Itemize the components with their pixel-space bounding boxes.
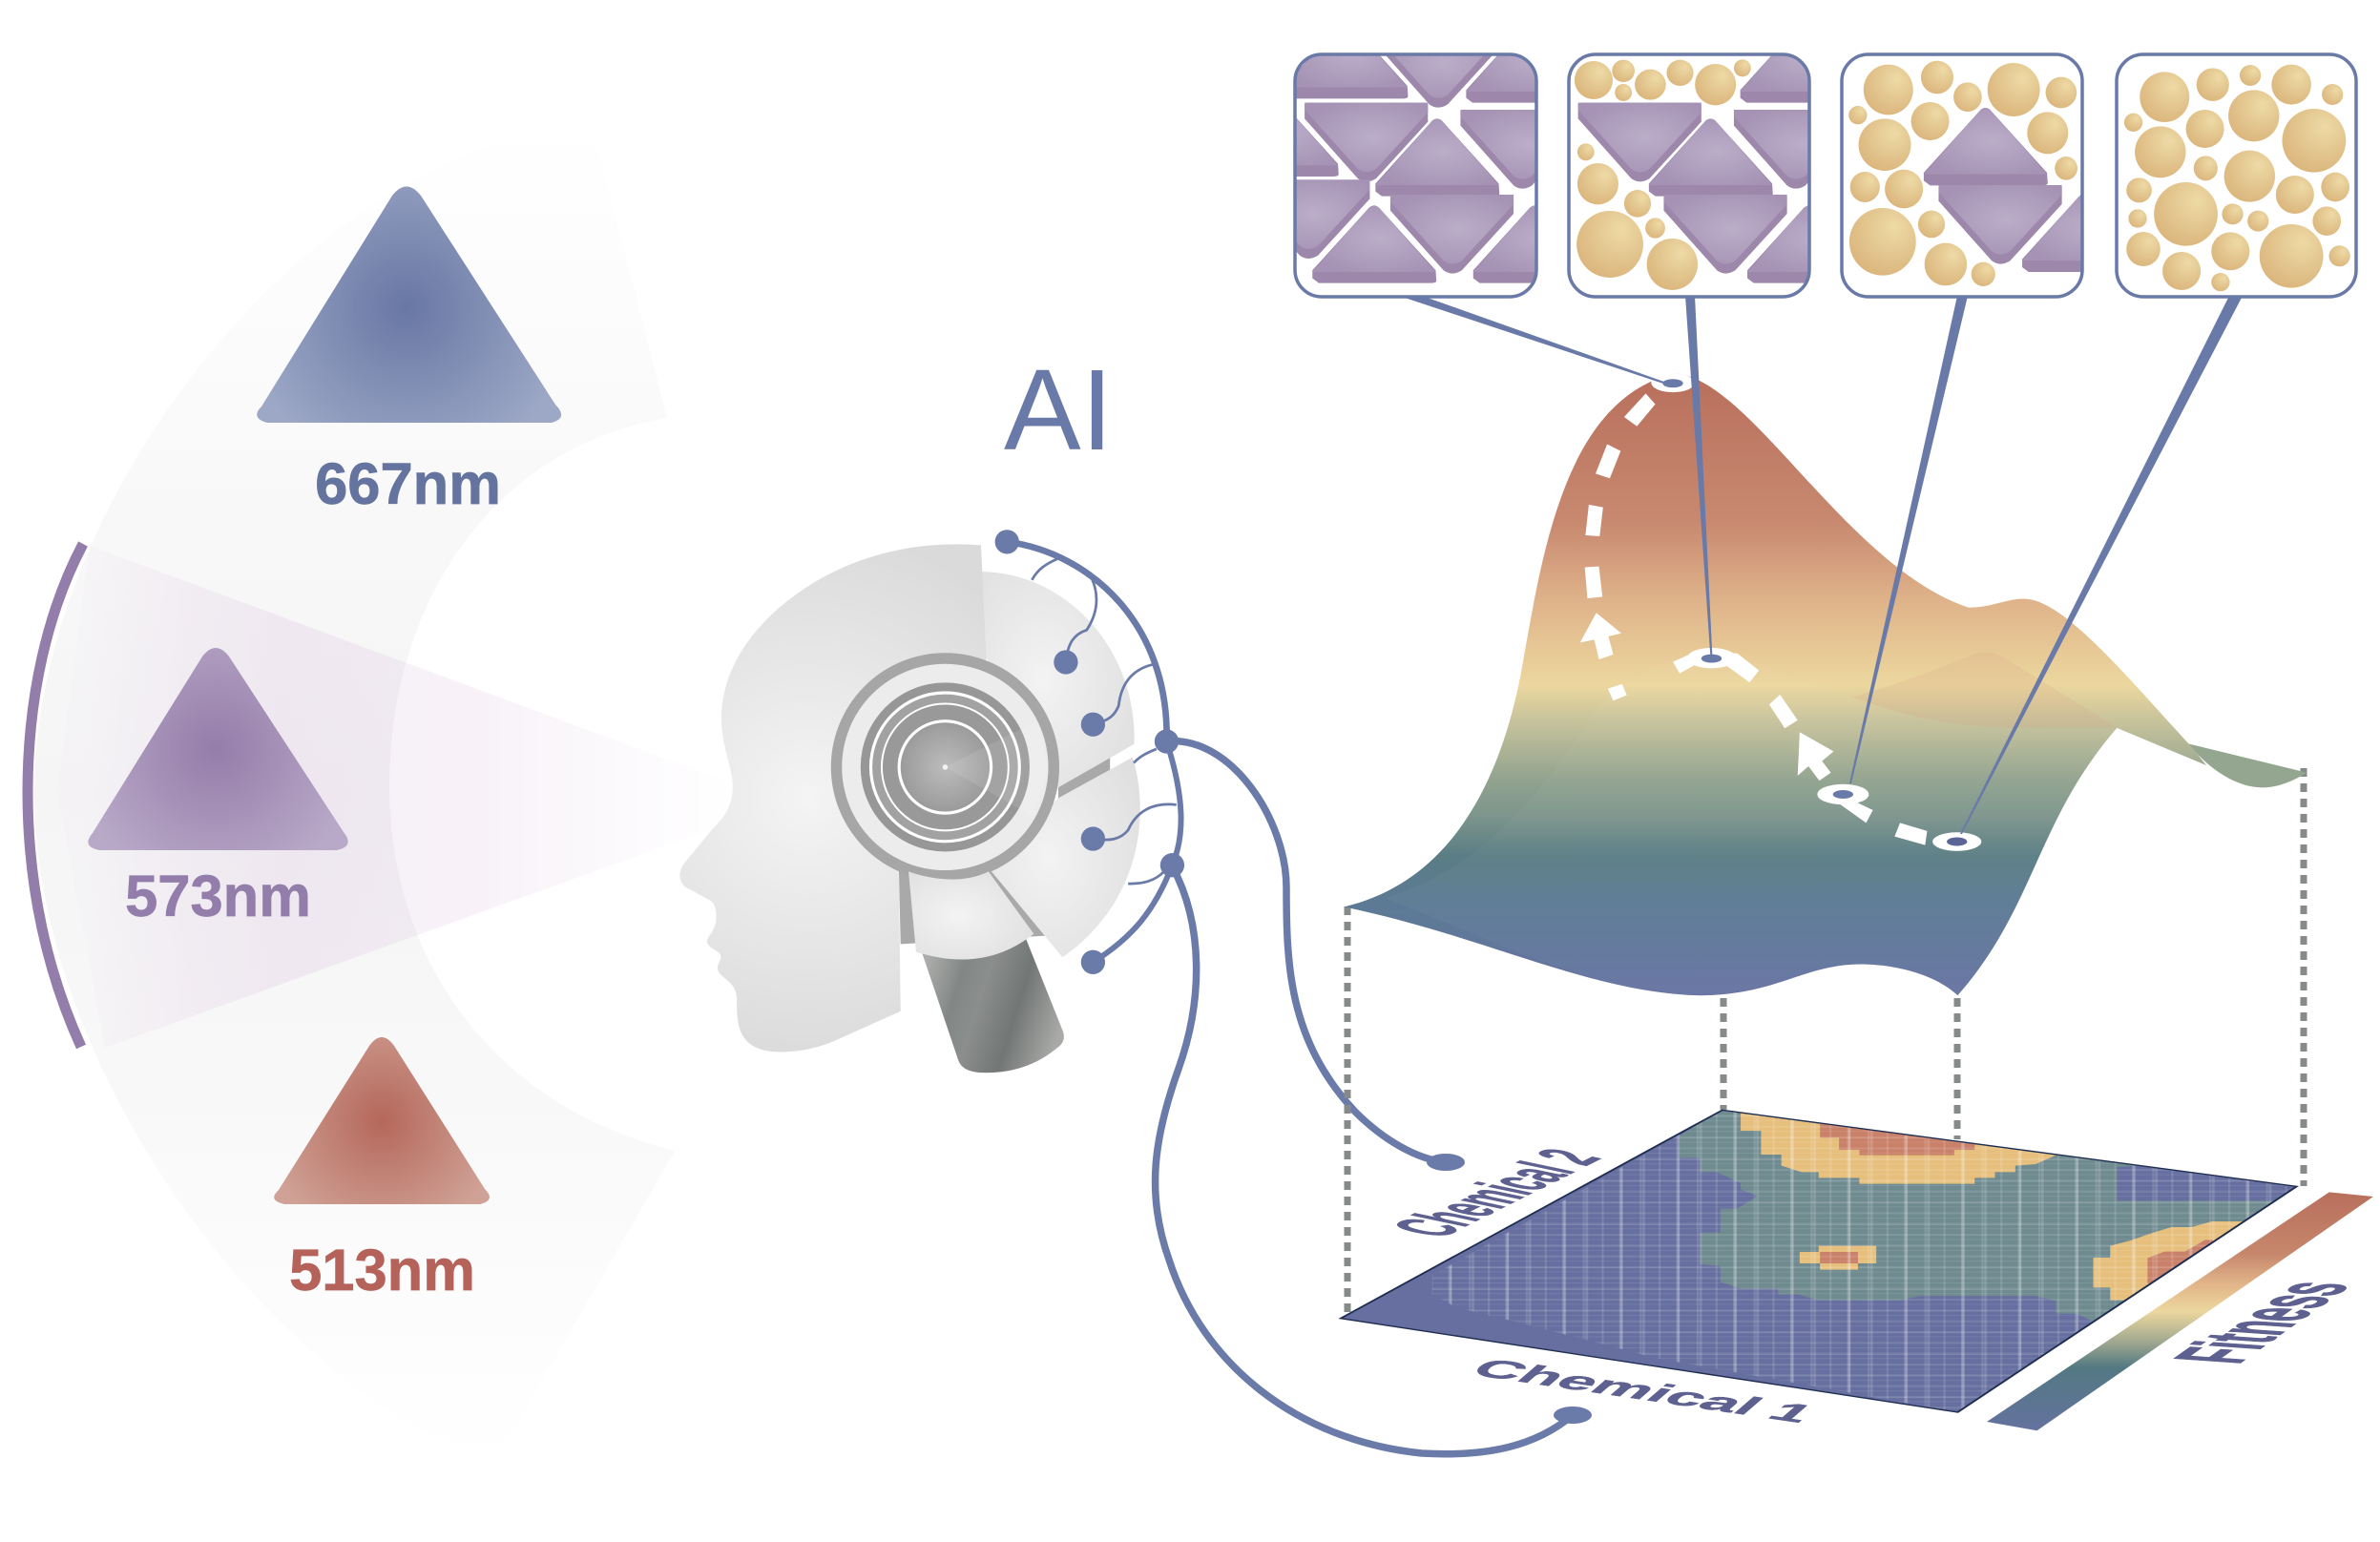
heatmap [1341, 1110, 2373, 1430]
axis label: Fitness: Fitness [2153, 1279, 2372, 1366]
axis label: Chemical 1: Chemical 1 [1463, 1354, 1824, 1427]
yellow region right [2094, 1221, 2252, 1301]
jaw plate [908, 871, 1033, 960]
sample points [1651, 373, 1981, 851]
outer ring [837, 658, 1054, 876]
yellow spot centre [1800, 1246, 1876, 1270]
red spot centre [1820, 1252, 1858, 1263]
neural wires [995, 530, 1592, 1454]
light beam [57, 546, 735, 1048]
label 513nm: 513nm [289, 1238, 475, 1303]
panel: wavelength fan [28, 124, 735, 1460]
skull plate lower right [989, 758, 1140, 957]
base low fitness [1341, 1110, 2297, 1412]
surface front fold [1385, 654, 2117, 995]
back lobe [2188, 743, 2307, 787]
AI robot head [679, 544, 1140, 1073]
selection arc [28, 544, 83, 1047]
grid texture [1432, 1110, 2297, 1412]
icon: 513nm triangle [274, 1037, 490, 1204]
concentric core [861, 682, 1048, 851]
gray inner structure [899, 758, 1110, 944]
panel: all spheres [2117, 54, 2356, 297]
dotted projection lines [1347, 768, 2304, 1319]
neck cylinder [921, 938, 1064, 1073]
search path dashes [1580, 393, 1927, 845]
icon: 573nm triangle [88, 648, 348, 850]
panel: triangles and some spheres [1567, 52, 1811, 299]
icon: 667nm triangle [257, 187, 561, 423]
surface back [1344, 373, 2206, 995]
title: AI: AI [1004, 344, 1113, 474]
skull plate top right [982, 572, 1135, 788]
3D fitness landscape [1344, 373, 2307, 995]
yellow region top [1741, 1114, 2056, 1184]
panel: few triangles, more spheres [1840, 52, 2084, 299]
teal region [1680, 1110, 2300, 1322]
axis label: Chemical 2: Chemical 2 [1374, 1144, 1619, 1242]
red region top [1820, 1123, 1974, 1156]
label 667nm: 667nm [315, 451, 501, 517]
label 573nm: 573nm [125, 864, 311, 929]
fitness colour bar [1987, 1192, 2373, 1430]
panel: all triangles [1293, 52, 1538, 299]
red region right [2147, 1240, 2219, 1283]
face silhouette [679, 544, 987, 1052]
connector lines [1399, 296, 2243, 834]
ridge highlight [1852, 652, 2117, 728]
fan background [34, 124, 675, 1460]
